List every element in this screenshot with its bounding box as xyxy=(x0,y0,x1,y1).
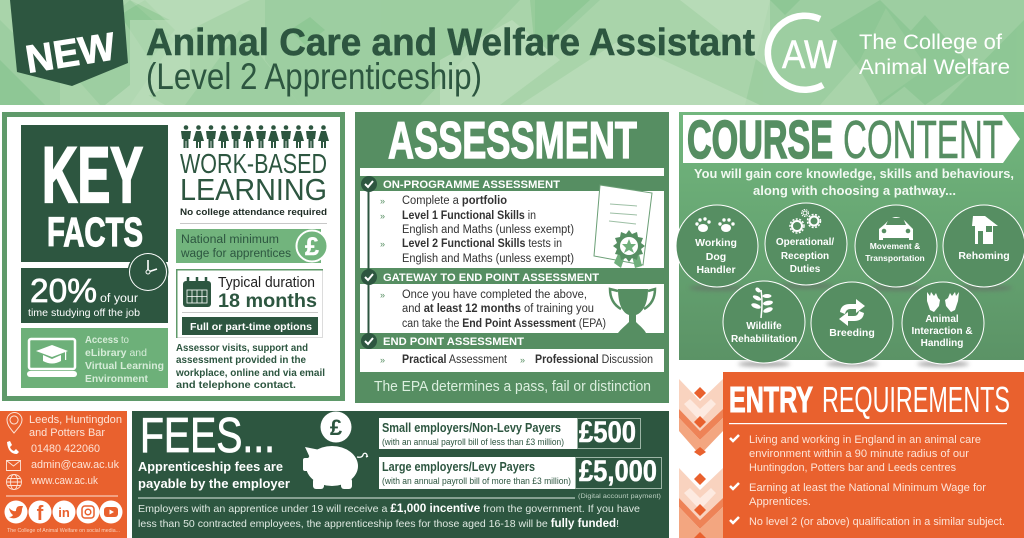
card: typical duration xyxy=(176,269,323,338)
pathway: rehoming xyxy=(943,205,1024,287)
pathway: working dog handler: Dog xyxy=(706,251,726,263)
list: on-programme items: Level 1 Functional Skills in xyxy=(402,210,536,222)
text: incentive and funding: Employers with an apprentice under 19 will receive a £1,000 incentive from the government. If you have xyxy=(138,503,640,515)
card: eLibrary access xyxy=(21,328,168,388)
fee row: small employers: (with an annual payroll bill of less than £3 million) xyxy=(382,437,564,447)
list: end point items: » xyxy=(380,355,385,365)
icon: laptop with graduation cap xyxy=(27,339,77,377)
list: on-programme items: English and Maths (unless exempt) xyxy=(402,224,574,236)
pathway: rehoming: Rehoming xyxy=(958,250,1010,262)
list: gateway items: » xyxy=(380,290,385,300)
icon: calendar xyxy=(183,277,211,307)
list: on-programme items: English and Maths (unless exempt) xyxy=(402,253,574,265)
list: on-programme items: Level 2 Functional Skills tests in xyxy=(402,238,562,250)
timeline: stages: ON-PROGRAMME ASSESSMENT xyxy=(383,179,560,191)
list: entry requirement items: environment within a 90 minute radius of our xyxy=(749,448,969,460)
card: national minimum wage xyxy=(176,229,328,263)
text: locations: Leeds, Huntingdon xyxy=(29,414,122,426)
card: eLibrary access: Virtual Learning xyxy=(85,360,164,372)
stat: 20 percent off the job: time studying off the job xyxy=(28,308,140,319)
pathway: working dog handler xyxy=(676,205,758,287)
icon: phone xyxy=(7,441,19,454)
list: gateway items: Once you have completed the above, xyxy=(402,289,587,301)
list: gateway items xyxy=(380,289,606,330)
logo: College of Animal Welfare xyxy=(768,16,1010,90)
pathway: movement and transportation xyxy=(855,205,937,287)
pathway: animal interaction and handling: Handling xyxy=(921,338,963,349)
list: entry requirement items: Huntingdon, Potters bar and Leeds centres xyxy=(749,462,956,474)
card: eLibrary access: Access to xyxy=(85,334,129,346)
icon: email envelope xyxy=(6,460,20,470)
key facts heading block xyxy=(21,125,168,262)
card: eLibrary access: Environment xyxy=(85,373,148,385)
timeline: stages xyxy=(360,176,664,349)
pathway: movement and transportation: Movement & xyxy=(870,241,920,251)
fee row: large employers: Large employers/Levy Payers xyxy=(382,459,535,474)
intro text: You will gain core knowledge, skills and behaviours, xyxy=(694,167,1014,181)
logo: College of Animal Welfare: AW xyxy=(782,33,837,77)
pathway: operational and reception duties: Duties xyxy=(790,264,821,275)
list: entry requirement items xyxy=(730,434,1005,528)
pathway: movement and transportation: Transportation xyxy=(865,253,925,263)
list: on-programme items xyxy=(380,195,574,265)
text: incentive and funding: less than 50 contracted employees, the apprenticeship fees for those aged 16-18 will be fully funded! xyxy=(138,518,619,530)
pathway: operational and reception duties xyxy=(765,203,847,285)
text: assessor visits xyxy=(175,343,325,391)
key facts heading block: FACTS xyxy=(47,209,143,255)
pathway: wildlife rehabilitation xyxy=(723,281,805,363)
list: entry requirement items: Apprentices. xyxy=(749,496,811,508)
note: no college attendance: No college attendance required xyxy=(180,207,327,218)
text: locations xyxy=(29,414,122,439)
text: phone number: 01480 422060 xyxy=(31,443,100,455)
text: assessor visits: assessment provided in the xyxy=(176,355,306,366)
card: national minimum wage: National minimum xyxy=(181,234,279,246)
heading arrow: course content xyxy=(683,110,1020,170)
heading: assessment: ASSESSMENT xyxy=(388,112,637,170)
list: on-programme items: Complete a portfolio xyxy=(402,195,507,207)
pathway: wildlife rehabilitation: Wildlife xyxy=(746,321,782,332)
fee row: large employers: (with an annual payroll bill of more than £3 million) xyxy=(382,476,571,486)
list: on-programme items: » xyxy=(380,196,385,206)
pathway: working dog handler: Working xyxy=(695,237,737,249)
card: national minimum wage: wage for apprentices xyxy=(180,248,291,260)
list: gateway items: and at least 12 months of training you xyxy=(402,303,594,315)
heading: work-based learning: WORK-BASED xyxy=(180,148,327,179)
stat: 20 percent off the job: 20% xyxy=(30,272,97,309)
caption: social media: The College of Animal Welfare on social media... xyxy=(7,528,120,534)
fee row: small employers: £500 xyxy=(579,416,636,449)
intro text: along with choosing a pathway... xyxy=(753,184,956,198)
list: gateway items: can take the End Point Assessment (EPA) xyxy=(402,318,606,330)
text: payable by employer: payable by the employer xyxy=(138,476,290,491)
text: assessor visits: workplace, online and via email xyxy=(175,368,325,379)
list: entry requirement items: Earning at least the National Minimum Wage for xyxy=(749,482,986,494)
icon: location pin xyxy=(7,413,22,433)
heading: entry requirements: ENTRY xyxy=(729,379,813,420)
pathway: animal interaction and handling: Animal xyxy=(925,314,959,325)
social media icons: f xyxy=(37,503,44,525)
key facts heading block: KEY xyxy=(42,130,143,219)
social media icons: in xyxy=(58,505,70,520)
subtitle: (Level 2 Apprenticeship) xyxy=(146,56,482,97)
icon: piggy bank with pound coin xyxy=(303,412,368,489)
header banner xyxy=(0,0,1024,105)
banner: NEW: NEW xyxy=(23,25,118,82)
text: locations: and Potters Bar xyxy=(29,427,105,439)
list: end point items xyxy=(380,354,653,366)
timeline: stages: END POINT ASSESSMENT xyxy=(383,336,524,348)
card: eLibrary access: eLibrary and xyxy=(85,347,147,359)
pathway: animal interaction and handling: Interaction & xyxy=(911,326,973,337)
list: end point items: Professional Discussion xyxy=(535,354,653,366)
text: incentive and funding xyxy=(138,503,640,530)
stat: 20 percent off the job xyxy=(21,268,168,323)
panel: contact details xyxy=(0,411,127,538)
panel: course content xyxy=(676,110,1024,367)
list: entry requirement items: Living and working in England in an animal care xyxy=(749,434,981,446)
list: entry requirement items: No level 2 (or above) qualification in a similar subject. xyxy=(749,516,1005,528)
pathway circles shadow xyxy=(689,283,1012,367)
list: end point items: Practical Assessment xyxy=(402,354,508,366)
timeline: stages: GATEWAY TO END POINT ASSESSMENT xyxy=(383,272,599,284)
decoration: chevrons xyxy=(679,379,723,538)
text: payable by employer: Apprenticeship fees are xyxy=(138,459,283,474)
fee row: large employers xyxy=(379,455,662,489)
card: typical duration: 18 months xyxy=(218,291,317,312)
pathway: breeding xyxy=(811,282,893,364)
icon: pound coin: £ xyxy=(305,233,319,261)
icon: globe xyxy=(6,474,22,490)
heading: work-based learning xyxy=(180,148,327,207)
list: on-programme items: » xyxy=(380,211,385,221)
icon: piggy bank with pound coin: £ xyxy=(330,415,343,440)
logo: College of Animal Welfare: The College of xyxy=(859,30,1002,54)
card: typical duration: Typical duration xyxy=(218,274,315,291)
heading: fees: FEES... xyxy=(140,409,275,463)
list: end point items: » xyxy=(520,355,525,365)
text: email: admin@caw.ac.uk xyxy=(31,459,119,471)
text: assessor visits: Assessor visits, support and xyxy=(176,343,308,354)
card: typical duration: Full or part-time options xyxy=(190,322,312,333)
icon: trophy xyxy=(610,289,655,333)
social media icons xyxy=(4,500,122,525)
intro text xyxy=(694,167,1014,198)
note: digital account payment: (Digital account payment) xyxy=(578,493,661,500)
text: payable by employer xyxy=(138,459,290,491)
title: Animal Care and Welfare Assistant xyxy=(146,22,755,64)
pathway: working dog handler: Handler xyxy=(696,264,736,276)
heading: work-based learning: LEARNING xyxy=(180,172,327,207)
icon: row of people xyxy=(181,125,329,148)
fee row: large employers: £5,000 xyxy=(579,455,657,488)
panel: assessment xyxy=(355,112,669,403)
fee row: small employers: Small employers/Non-Levy Payers xyxy=(382,420,561,435)
panel: entry requirements xyxy=(679,372,1024,538)
text: assessor visits: and telephone contact. xyxy=(176,380,296,391)
pathway: wildlife rehabilitation: Rehabilitation xyxy=(731,334,797,345)
panel: key facts xyxy=(2,112,345,401)
list: on-programme items: » xyxy=(380,239,385,249)
icon: certificate xyxy=(594,185,652,268)
heading: entry requirements xyxy=(729,379,1010,420)
heading arrow: course content: COURSE xyxy=(687,110,833,170)
icon: pound coin xyxy=(296,230,328,262)
pathway: breeding: Breeding xyxy=(829,327,875,339)
icon: clock xyxy=(128,252,168,292)
pathway: animal interaction and handling xyxy=(902,282,984,364)
banner: NEW xyxy=(10,0,128,86)
pathway: operational and reception duties: Reception xyxy=(781,251,829,262)
stat: 20 percent off the job: of your xyxy=(100,293,138,305)
fee row: small employers xyxy=(379,416,640,449)
footer note: EPA outcome: The EPA determines a pass, fail or distinction xyxy=(374,379,651,395)
panel: fees xyxy=(132,409,669,538)
pathway: operational and reception duties: Operational/ xyxy=(776,237,834,248)
text: website: www.caw.ac.uk xyxy=(30,475,98,487)
logo: College of Animal Welfare: Animal Welfare xyxy=(859,55,1010,79)
